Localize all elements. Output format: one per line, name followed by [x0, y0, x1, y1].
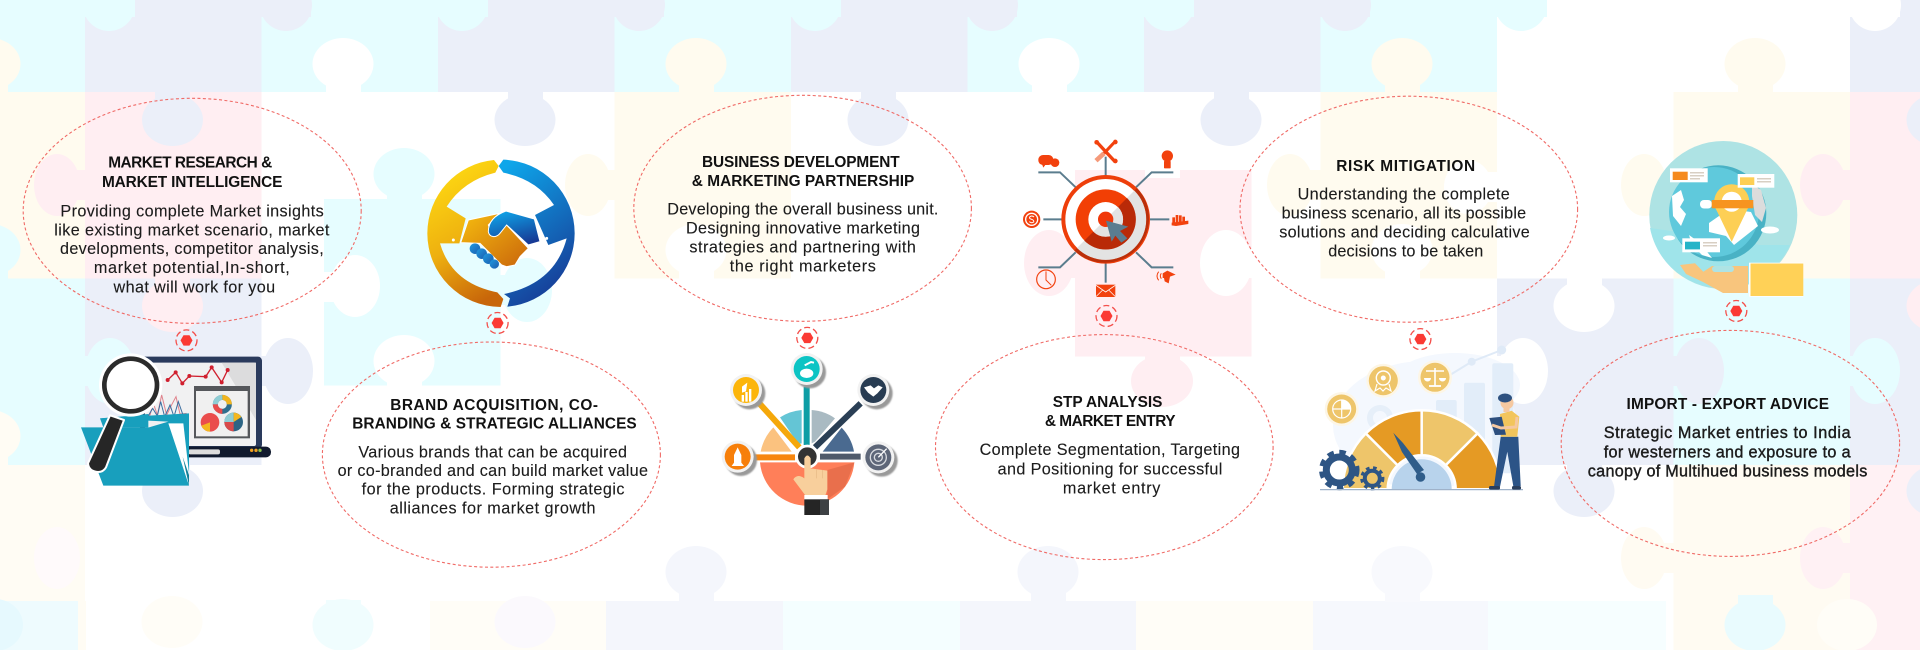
- heading: & MARKET ENTRY: [1045, 413, 1176, 430]
- heading: & MARKETING PARTNERSHIP: [692, 173, 914, 190]
- bubble outline: [634, 95, 971, 321]
- heading: [692, 154, 914, 190]
- description: Various brands that can be acquired: [358, 443, 627, 461]
- description: the right marketers: [730, 258, 876, 276]
- connector dot 3: [797, 327, 818, 348]
- connector dot 4: [1096, 306, 1117, 326]
- connector dot 5: [1410, 329, 1431, 350]
- panel: risk mitigation: [1240, 96, 1578, 322]
- description: alliances for market growth: [390, 500, 596, 518]
- description: strategies and partnering with: [689, 238, 916, 256]
- heading: [1045, 394, 1176, 430]
- connector dot 1: [176, 330, 197, 351]
- description: like existing market scenario, market: [54, 222, 330, 240]
- description: market potential,In-short,: [94, 259, 290, 277]
- bubble outline: [1561, 330, 1900, 556]
- description: Complete Segmentation, Targeting: [980, 441, 1240, 459]
- description: [54, 202, 330, 296]
- description: [338, 443, 648, 518]
- description: Developing the overall business unit.: [667, 200, 938, 218]
- description: Designing innovative marketing: [686, 219, 920, 237]
- heading: MARKET INTELLIGENCE: [102, 174, 282, 191]
- heading: [102, 155, 282, 191]
- panel: brand acquisition: [322, 342, 660, 567]
- heading: RISK MITIGATION: [1336, 158, 1475, 175]
- icon: hub with five spokes: [722, 353, 898, 515]
- description: Providing complete Market insights: [60, 202, 324, 220]
- heading: [352, 397, 637, 432]
- panel: market research: [23, 98, 361, 323]
- icon: risk gauge with person: [1320, 346, 1523, 490]
- heading: STP ANALYSIS: [1053, 394, 1162, 411]
- panel: business development: [634, 95, 971, 321]
- connector dot 6: [1726, 300, 1747, 322]
- panel: import export: [1561, 330, 1900, 556]
- description: market entry: [1063, 479, 1161, 497]
- description: and Positioning for successful: [998, 460, 1222, 478]
- heading: IMPORT - EXPORT ADVICE: [1626, 396, 1829, 413]
- icon: target with radiating icons: [1023, 140, 1188, 297]
- heading: BUSINESS DEVELOPMENT: [702, 154, 900, 171]
- bubble outline: [23, 98, 361, 323]
- heading: MARKET RESEARCH &: [108, 155, 272, 172]
- description: Understanding the complete: [1298, 185, 1510, 203]
- heading: BRAND ACQUISITION, CO-: [390, 397, 598, 414]
- description: for westerners and exposure to a: [1604, 443, 1851, 461]
- description: business scenario, all its possible: [1282, 204, 1526, 222]
- description: Strategic Market entries to India: [1604, 424, 1851, 442]
- heading: BRANDING & STRATEGIC ALLIANCES: [352, 415, 637, 432]
- description: or co-branded and can build market value: [338, 462, 648, 480]
- description: [1279, 185, 1530, 261]
- icon: laptop, folder and magnifier: [81, 353, 271, 486]
- description: [1588, 424, 1867, 480]
- bubble outline: [322, 342, 660, 567]
- description: solutions and deciding calculative: [1279, 224, 1530, 242]
- description: [667, 200, 938, 276]
- connector dot 2: [487, 312, 508, 334]
- bubble outline: [1240, 96, 1578, 322]
- description: decisions to be taken: [1328, 243, 1483, 261]
- description: what will work for you: [112, 278, 275, 296]
- bubble outline: [936, 335, 1273, 560]
- description: developments, competitor analysis,: [60, 240, 324, 258]
- description: [980, 441, 1240, 497]
- icon: globe held in hand with pin: [1649, 141, 1803, 297]
- description: for the products. Forming strategic: [362, 481, 624, 499]
- description: canopy of Multihued business models: [1588, 462, 1867, 480]
- icon: handshake in ring: [427, 160, 575, 307]
- panel: stp analysis: [936, 335, 1273, 560]
